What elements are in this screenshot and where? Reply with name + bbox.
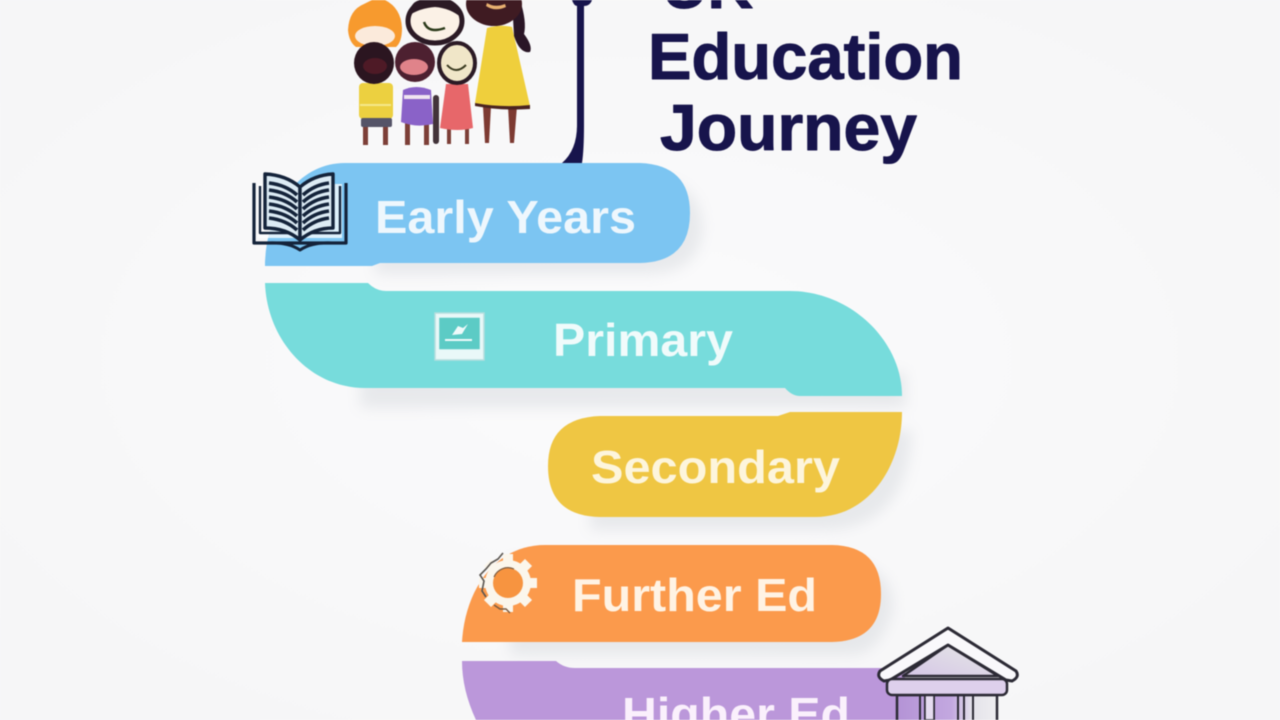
icon: open book (254, 174, 346, 250)
adult in yellow dress (466, 0, 531, 143)
label: primary: Primary (553, 314, 733, 366)
panel: primary (265, 283, 902, 396)
label: early years: Early Years (375, 191, 636, 243)
entablature (887, 679, 1007, 695)
title: Journey (660, 91, 917, 164)
panel: secondary (548, 412, 902, 517)
band shadows (360, 180, 912, 655)
child in pink dress (439, 43, 475, 144)
connector line (562, 0, 592, 163)
child in purple top (395, 42, 439, 145)
roof chevron (879, 628, 1017, 681)
title (648, 0, 963, 164)
child with black hair and smile (408, 0, 462, 43)
icon: family group (348, 0, 531, 145)
title: Education (648, 20, 963, 93)
child in yellow top (354, 42, 394, 145)
icon: picture frame (435, 313, 484, 360)
icon: university building (879, 628, 1017, 720)
panel: further ed (462, 545, 881, 642)
panel: higher ed (462, 661, 905, 720)
child with orange hair (348, 0, 402, 47)
icon: gear (479, 553, 537, 613)
panel: early years (265, 163, 690, 266)
label: secondary: Secondary (591, 441, 840, 493)
pediment (903, 645, 998, 676)
columns (897, 695, 997, 720)
label: further ed: Further Ed (572, 569, 817, 621)
